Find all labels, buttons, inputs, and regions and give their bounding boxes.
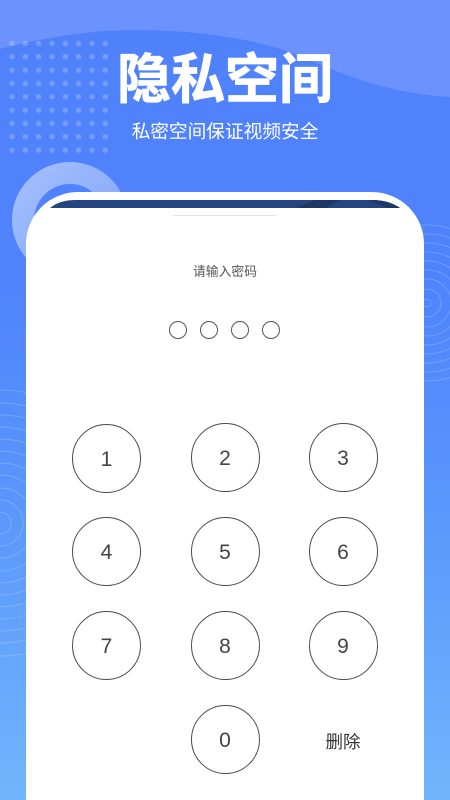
prompt text: 请输入密码 [193, 264, 257, 279]
keypad: 3 [337, 447, 349, 470]
keypad: 8 [219, 635, 231, 658]
keypad [72, 423, 378, 774]
keypad: 7 [101, 635, 112, 658]
password dots [169, 321, 280, 339]
keypad: 0 [219, 729, 231, 752]
keypad: 9 [337, 635, 349, 658]
keypad: 6 [337, 541, 349, 564]
keypad: 2 [219, 447, 231, 470]
subtitle: 私密空间保证视频安全 [132, 121, 318, 142]
panel: phone lock screen [26, 192, 424, 800]
dark screen strip [50, 200, 400, 208]
grab line [173, 215, 276, 216]
title: 隐私空间 [117, 50, 333, 110]
keypad: 4 [101, 541, 112, 564]
keypad: 5 [219, 541, 231, 564]
keypad: 1 [101, 448, 112, 471]
delete button: 删除 [326, 732, 360, 752]
